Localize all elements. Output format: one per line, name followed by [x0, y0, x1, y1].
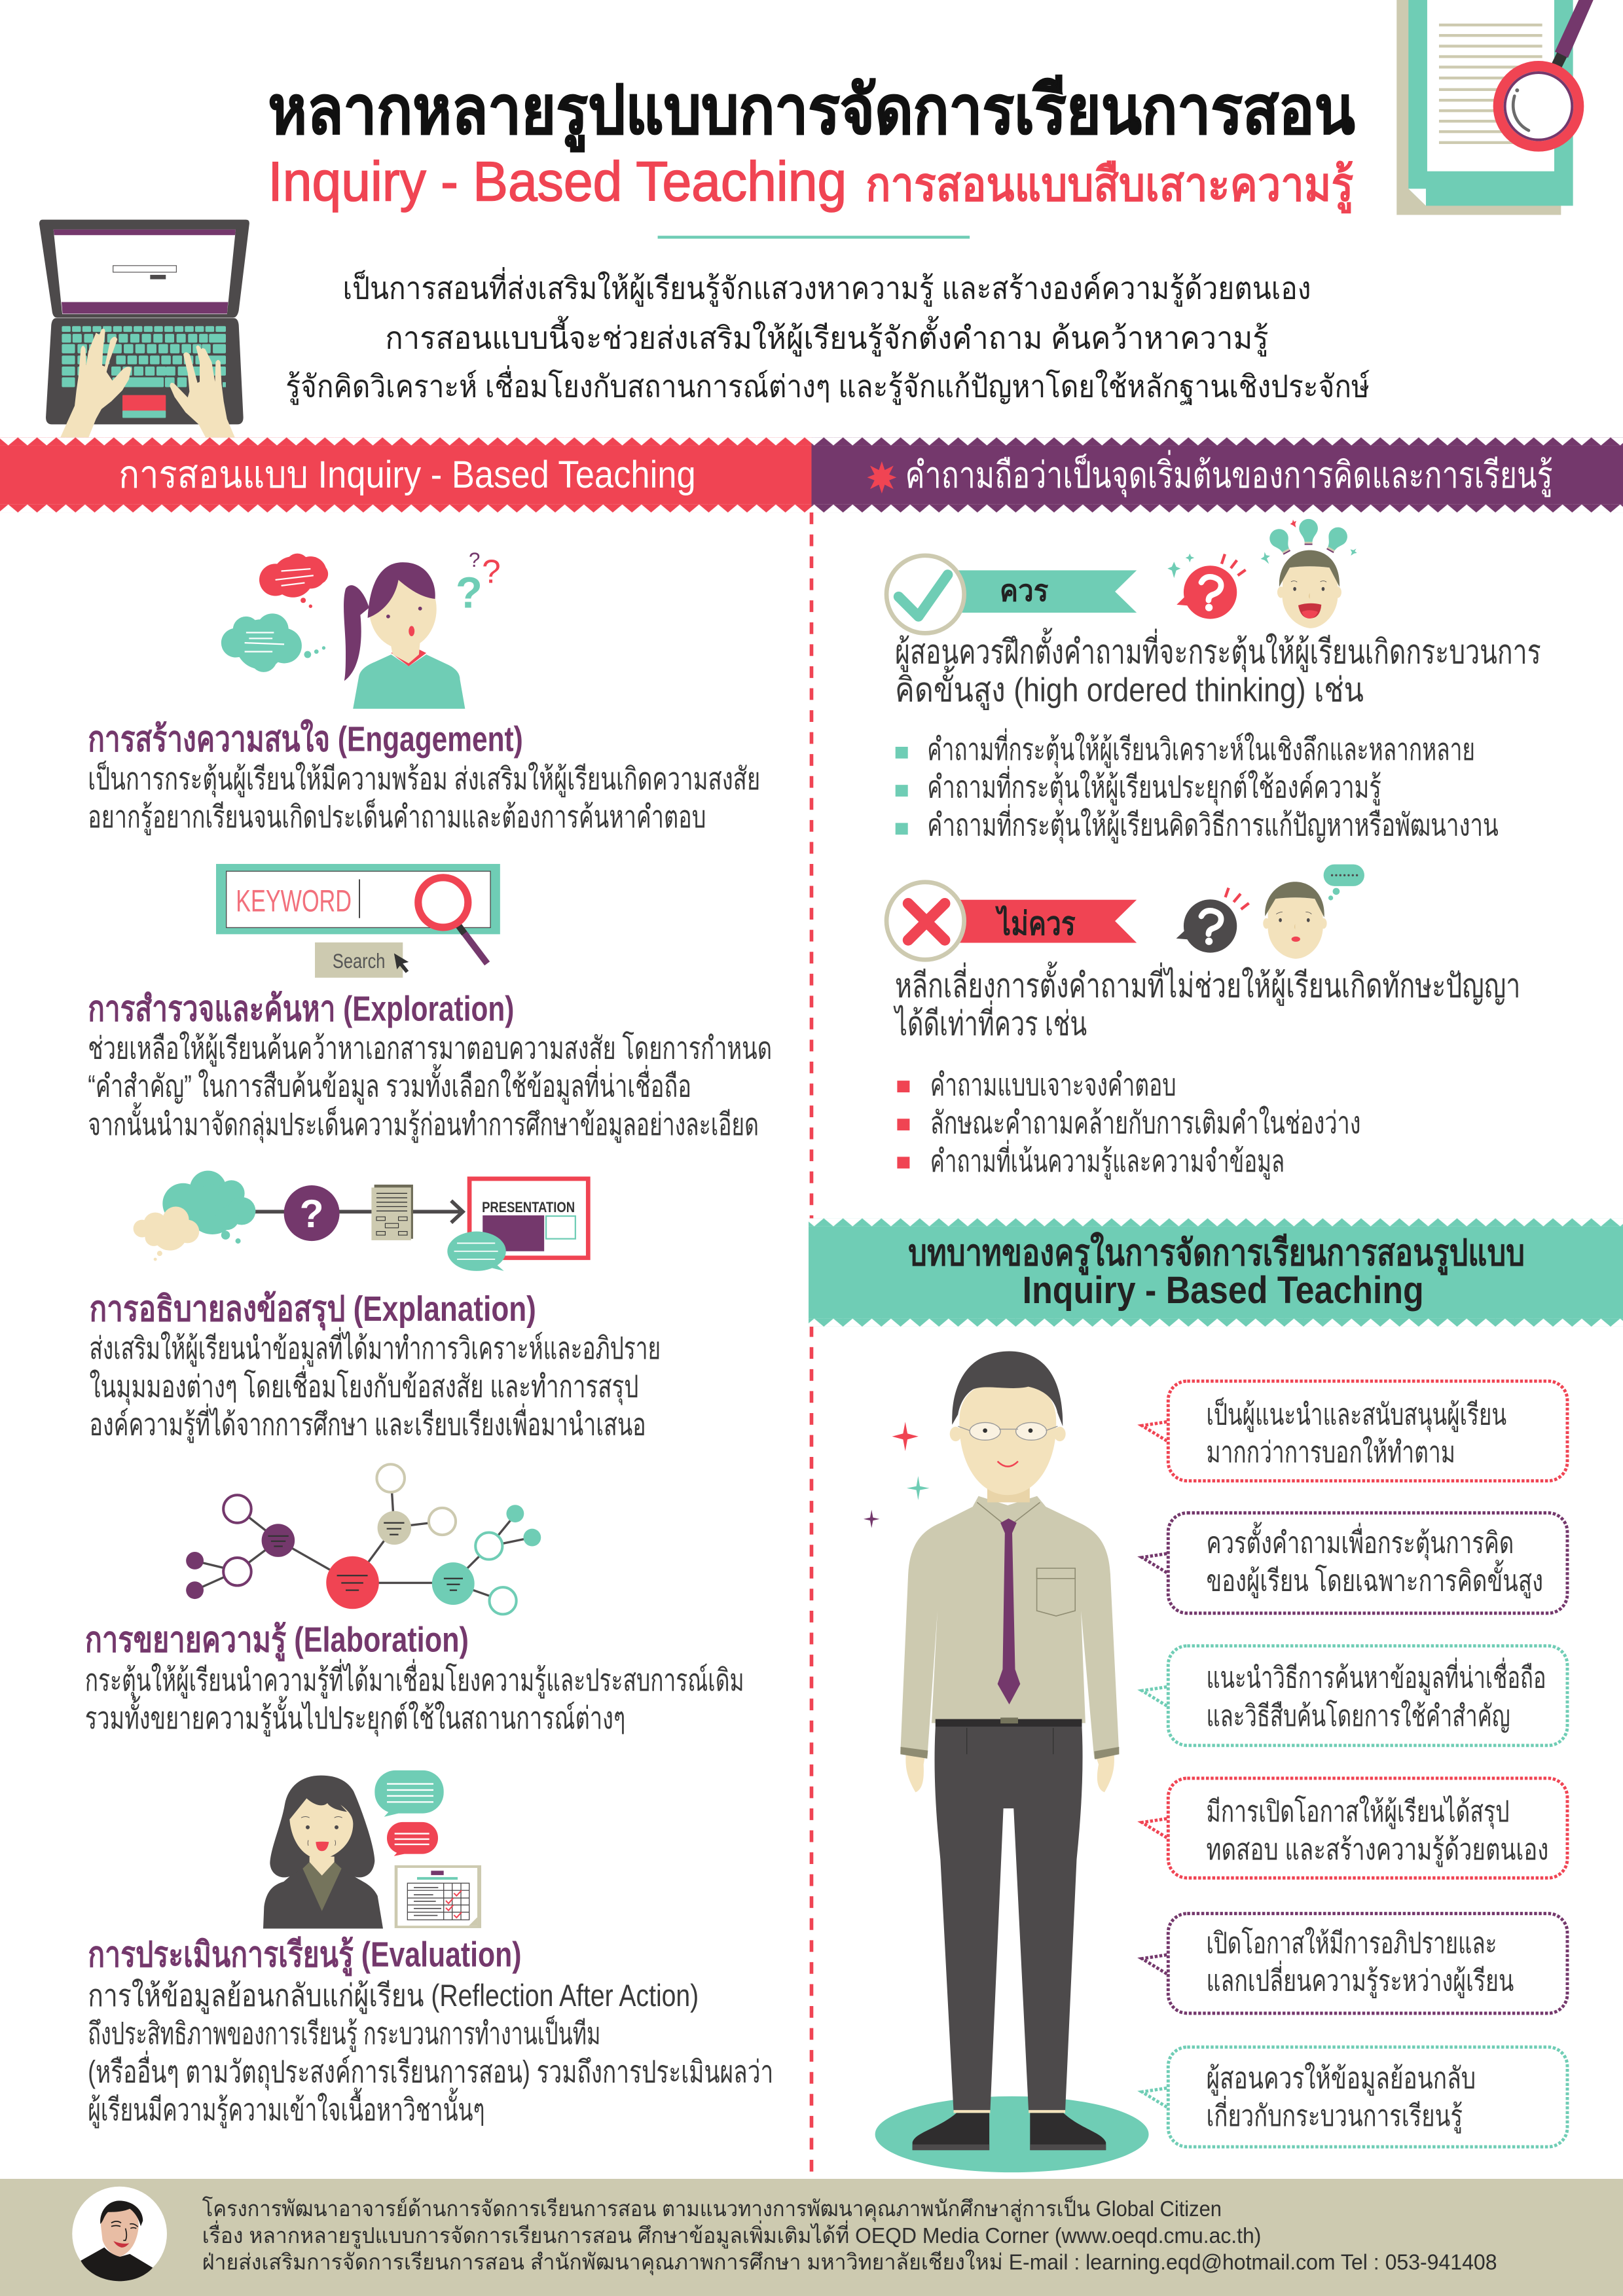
bullet list [897, 1067, 1361, 1180]
banner title: Inquiry - Based Teaching [1023, 1269, 1424, 1312]
heading: การสร้างความสนใจ (Engagement) [88, 719, 523, 759]
intro text: รู้จักคิดวิเคราะห์ เชื่อมโยงกับสถานการณ์ต่างๆ และรู้จักแก้ปัญหาโดยใช้หลักฐานเชิงประจักษ์ [285, 365, 1370, 405]
panel: should do [886, 519, 1541, 844]
bullet list: คำถามที่กระตุ้นให้ผู้เรียนประยุกต์ใช้องค์ความรู้ [927, 766, 1381, 806]
panel: explanation [89, 1171, 661, 1443]
callout 2: ควรตั้งคำถามเพื่อกระตุ้นการคิด [1206, 1522, 1514, 1561]
callout 1: มากกว่าการบอกให้ทำตาม [1206, 1435, 1455, 1469]
banner title [908, 1231, 1525, 1312]
panel: evaluation [88, 1770, 773, 2129]
intro text: การสอนแบบนี้จะช่วยส่งเสริมให้ผู้เรียนรู้จักตั้งคำถาม ค้นคว้าหาความรู้ [385, 315, 1269, 357]
text block: ส่งเสริมให้ผู้เรียนนำข้อมูลที่ได้มาทำการวิเคราะห์และอภิปราย [89, 1327, 661, 1367]
text block: เป็นการกระตุ้นผู้เรียนให้มีความพร้อม ส่งเสริมให้ผู้เรียนเกิดความสงสัย [88, 760, 760, 798]
icon: portrait [72, 2187, 167, 2281]
subtitle [268, 151, 1353, 214]
icon: check ribbon: ควร [1000, 575, 1048, 607]
text block: ในมุมมองต่างๆ โดยเชื่อมโยงกับข้อสงสัย และทำการสรุป [89, 1365, 638, 1405]
callout 3 [1142, 1646, 1567, 1746]
icon: question marks: ? [456, 568, 483, 617]
heading: การขยายความรู้ (Elaboration) [85, 1621, 469, 1662]
text block: รวมทั้งขยายความรู้นั้นไปประยุกต์ใช้ในสถานการณ์ต่างๆ [85, 1696, 625, 1737]
banner title: การสอนแบบ Inquiry - Based Teaching [119, 454, 696, 496]
footer [0, 2179, 1623, 2296]
panel: engagement [88, 548, 760, 836]
icon: question marks: ? [469, 548, 480, 571]
callout 1: เป็นผู้แนะนำและสนับสนุนผู้เรียน [1206, 1397, 1506, 1432]
text block [88, 1978, 773, 2129]
heading: การประเมินการเรียนรู้ (Evaluation) [88, 1935, 522, 1977]
bullet list: คำถามแบบเจาะจงคำตอบ [930, 1067, 1176, 1102]
icon: cloud question document presentation flow: ? [300, 1191, 324, 1236]
icon: search box: KEYWORD [236, 884, 352, 918]
text block: คิดขั้นสูง (high ordered thinking) เช่น [895, 666, 1364, 711]
footer text [202, 2195, 1497, 2276]
icon: search box: Search [333, 950, 385, 973]
icon: red question bubble and happy face [1167, 519, 1357, 628]
callout 4: มีการเปิดโอกาสให้ผู้เรียนได้สรุป [1206, 1795, 1510, 1829]
bullet list: คำถามที่เน้นความรู้และความจำข้อมูล [930, 1139, 1285, 1180]
text block [88, 760, 760, 836]
text block: ช่วยเหลือให้ผู้เรียนค้นคว้าหาเอกสารมาตอบความสงสัย โดยการกำหนด [88, 1031, 772, 1067]
icon: burst star [867, 461, 896, 493]
icon: dark question bubble and worried face [1176, 865, 1364, 959]
panel: should not do [886, 865, 1520, 1180]
icon: laptop with hands [39, 220, 249, 447]
section banner: inquiry based teaching [0, 437, 812, 512]
callout 6 [1142, 2047, 1567, 2147]
section banner: questions [812, 437, 1623, 512]
text block: กระตุ้นให้ผู้เรียนนำความรู้ที่ได้มาเชื่อมโยงความรู้และประสบการณ์เดิม [85, 1659, 744, 1699]
callout 5: เปิดโอกาสให้มีการอภิปรายและ [1206, 1926, 1497, 1960]
text block: ได้ดีเท่าที่ควร เช่น [893, 1001, 1087, 1043]
icon: teacher with speech bubbles and checklist [263, 1770, 481, 1929]
text block: ถึงประสิทธิภาพของการเรียนรู้ กระบวนการทำงานเป็นทีม [88, 2015, 600, 2053]
icon: question marks [456, 548, 501, 617]
subtitle: Inquiry - Based Teaching [268, 151, 847, 213]
text block [88, 1031, 772, 1143]
callout 5 [1142, 1914, 1567, 2013]
text block: (หรืออื่นๆ ตามวัตถุประสงค์การเรียนการสอน) รวมถึงการประเมินผลว่า [88, 2050, 773, 2090]
icon: thinking girl [221, 548, 501, 709]
heading: การอธิบายลงข้อสรุป (Explanation) [89, 1289, 536, 1331]
icon: sparkles [864, 1422, 930, 1528]
footer text: โครงการพัฒนาอาจารย์ด้านการจัดการเรียนการสอน ตามแนวทางการพัฒนาคุณภาพนักศึกษาสู่การเป็น Global Citizen [202, 2195, 1222, 2222]
text block: ผู้เรียนมีความรู้ความเข้าใจเนื้อหาวิชานั้นๆ [88, 2088, 485, 2129]
text block: องค์ความรู้ที่ได้จากการศึกษา และเรียบเรียงเพื่อมานำเสนอ [89, 1403, 646, 1443]
illustration: teacher standing [864, 1352, 1149, 2172]
intro text: เป็นการสอนที่ส่งเสริมให้ผู้เรียนรู้จักแสวงหาความรู้ และสร้างองค์ความรู้ด้วยตนเอง [343, 266, 1311, 307]
text block: “คำสำคัญ” ในการสืบค้นข้อมูล รวมทั้งเลือกใช้ข้อมูลที่น่าเชื่อถือ [88, 1064, 691, 1105]
section banner: teacher role [809, 1218, 1623, 1327]
bullet list: ลักษณะคำถามคล้ายกับการเติมคำในช่องว่าง [930, 1105, 1361, 1140]
callout 1 [1142, 1381, 1567, 1481]
icon: search box [216, 864, 500, 978]
callout 3: และวิธีสืบค้นโดยการใช้คำสำคัญ [1206, 1699, 1510, 1732]
callout 6: เกี่ยวกับกระบวนการเรียนรู้ [1206, 2096, 1463, 2134]
panel: elaboration [85, 1464, 744, 1737]
icon: cross ribbon [886, 882, 1137, 960]
chart: mind map network [186, 1464, 541, 1614]
icon: check ribbon [886, 556, 1137, 633]
callout 6: ผู้สอนควรให้ข้อมูลย้อนกลับ [1206, 2061, 1476, 2096]
icon: question marks: ? [482, 552, 501, 590]
intro text [285, 266, 1370, 405]
text block [893, 961, 1520, 1043]
icon: cloud question document presentation flow [134, 1171, 588, 1271]
text block [85, 1659, 744, 1737]
subtitle: การสอนแบบสืบเสาะความรู้ [866, 159, 1353, 214]
footer text: ฝ่ายส่งเสริมการจัดการเรียนการสอน สำนักพัฒนาคุณภาพการศึกษา มหาวิทยาลัยเชียงใหม่ E-mail : learning.eqd@hotmail.com Tel : 053-941408 [202, 2250, 1497, 2276]
title: หลากหลายรูปแบบการจัดการเรียนการสอน [268, 73, 1355, 152]
callout 2 [1142, 1513, 1567, 1613]
text block: อยากรู้อยากเรียนจนเกิดประเด็นคำถามและต้องการค้นหาคำตอบ [88, 798, 706, 836]
text block [895, 627, 1541, 711]
bullet list [896, 728, 1499, 844]
callouts: teacher roles [1142, 1381, 1567, 2147]
text block [89, 1327, 661, 1443]
icon: cross ribbon: ไม่ควร [995, 905, 1076, 942]
text block: จากนั้นนำมาจัดกลุ่มประเด็นความรู้ก่อนทำการศึกษาข้อมูลอย่างละเอียด [88, 1102, 759, 1143]
footer text: เรื่อง หลากหลายรูปแบบการจัดการเรียนการสอน ศึกษาข้อมูลเพิ่มเติมได้ที่ OEQD Media Corner (www.oeqd.cmu.ac.th) [202, 2220, 1261, 2249]
heading: การสำรวจและค้นหา (Exploration) [88, 989, 514, 1028]
icon: document with magnifier [1396, 0, 1594, 215]
icon: cloud question document presentation flow: PRESENTATION [482, 1199, 575, 1215]
panel: exploration [88, 864, 772, 1143]
callout 4 [1142, 1778, 1567, 1878]
text block: การให้ข้อมูลย้อนกลับแก่ผู้เรียน (Reflection After Action) [88, 1978, 699, 2015]
callout 5: แลกเปลี่ยนความรู้ระหว่างผู้เรียน [1206, 1961, 1514, 1999]
